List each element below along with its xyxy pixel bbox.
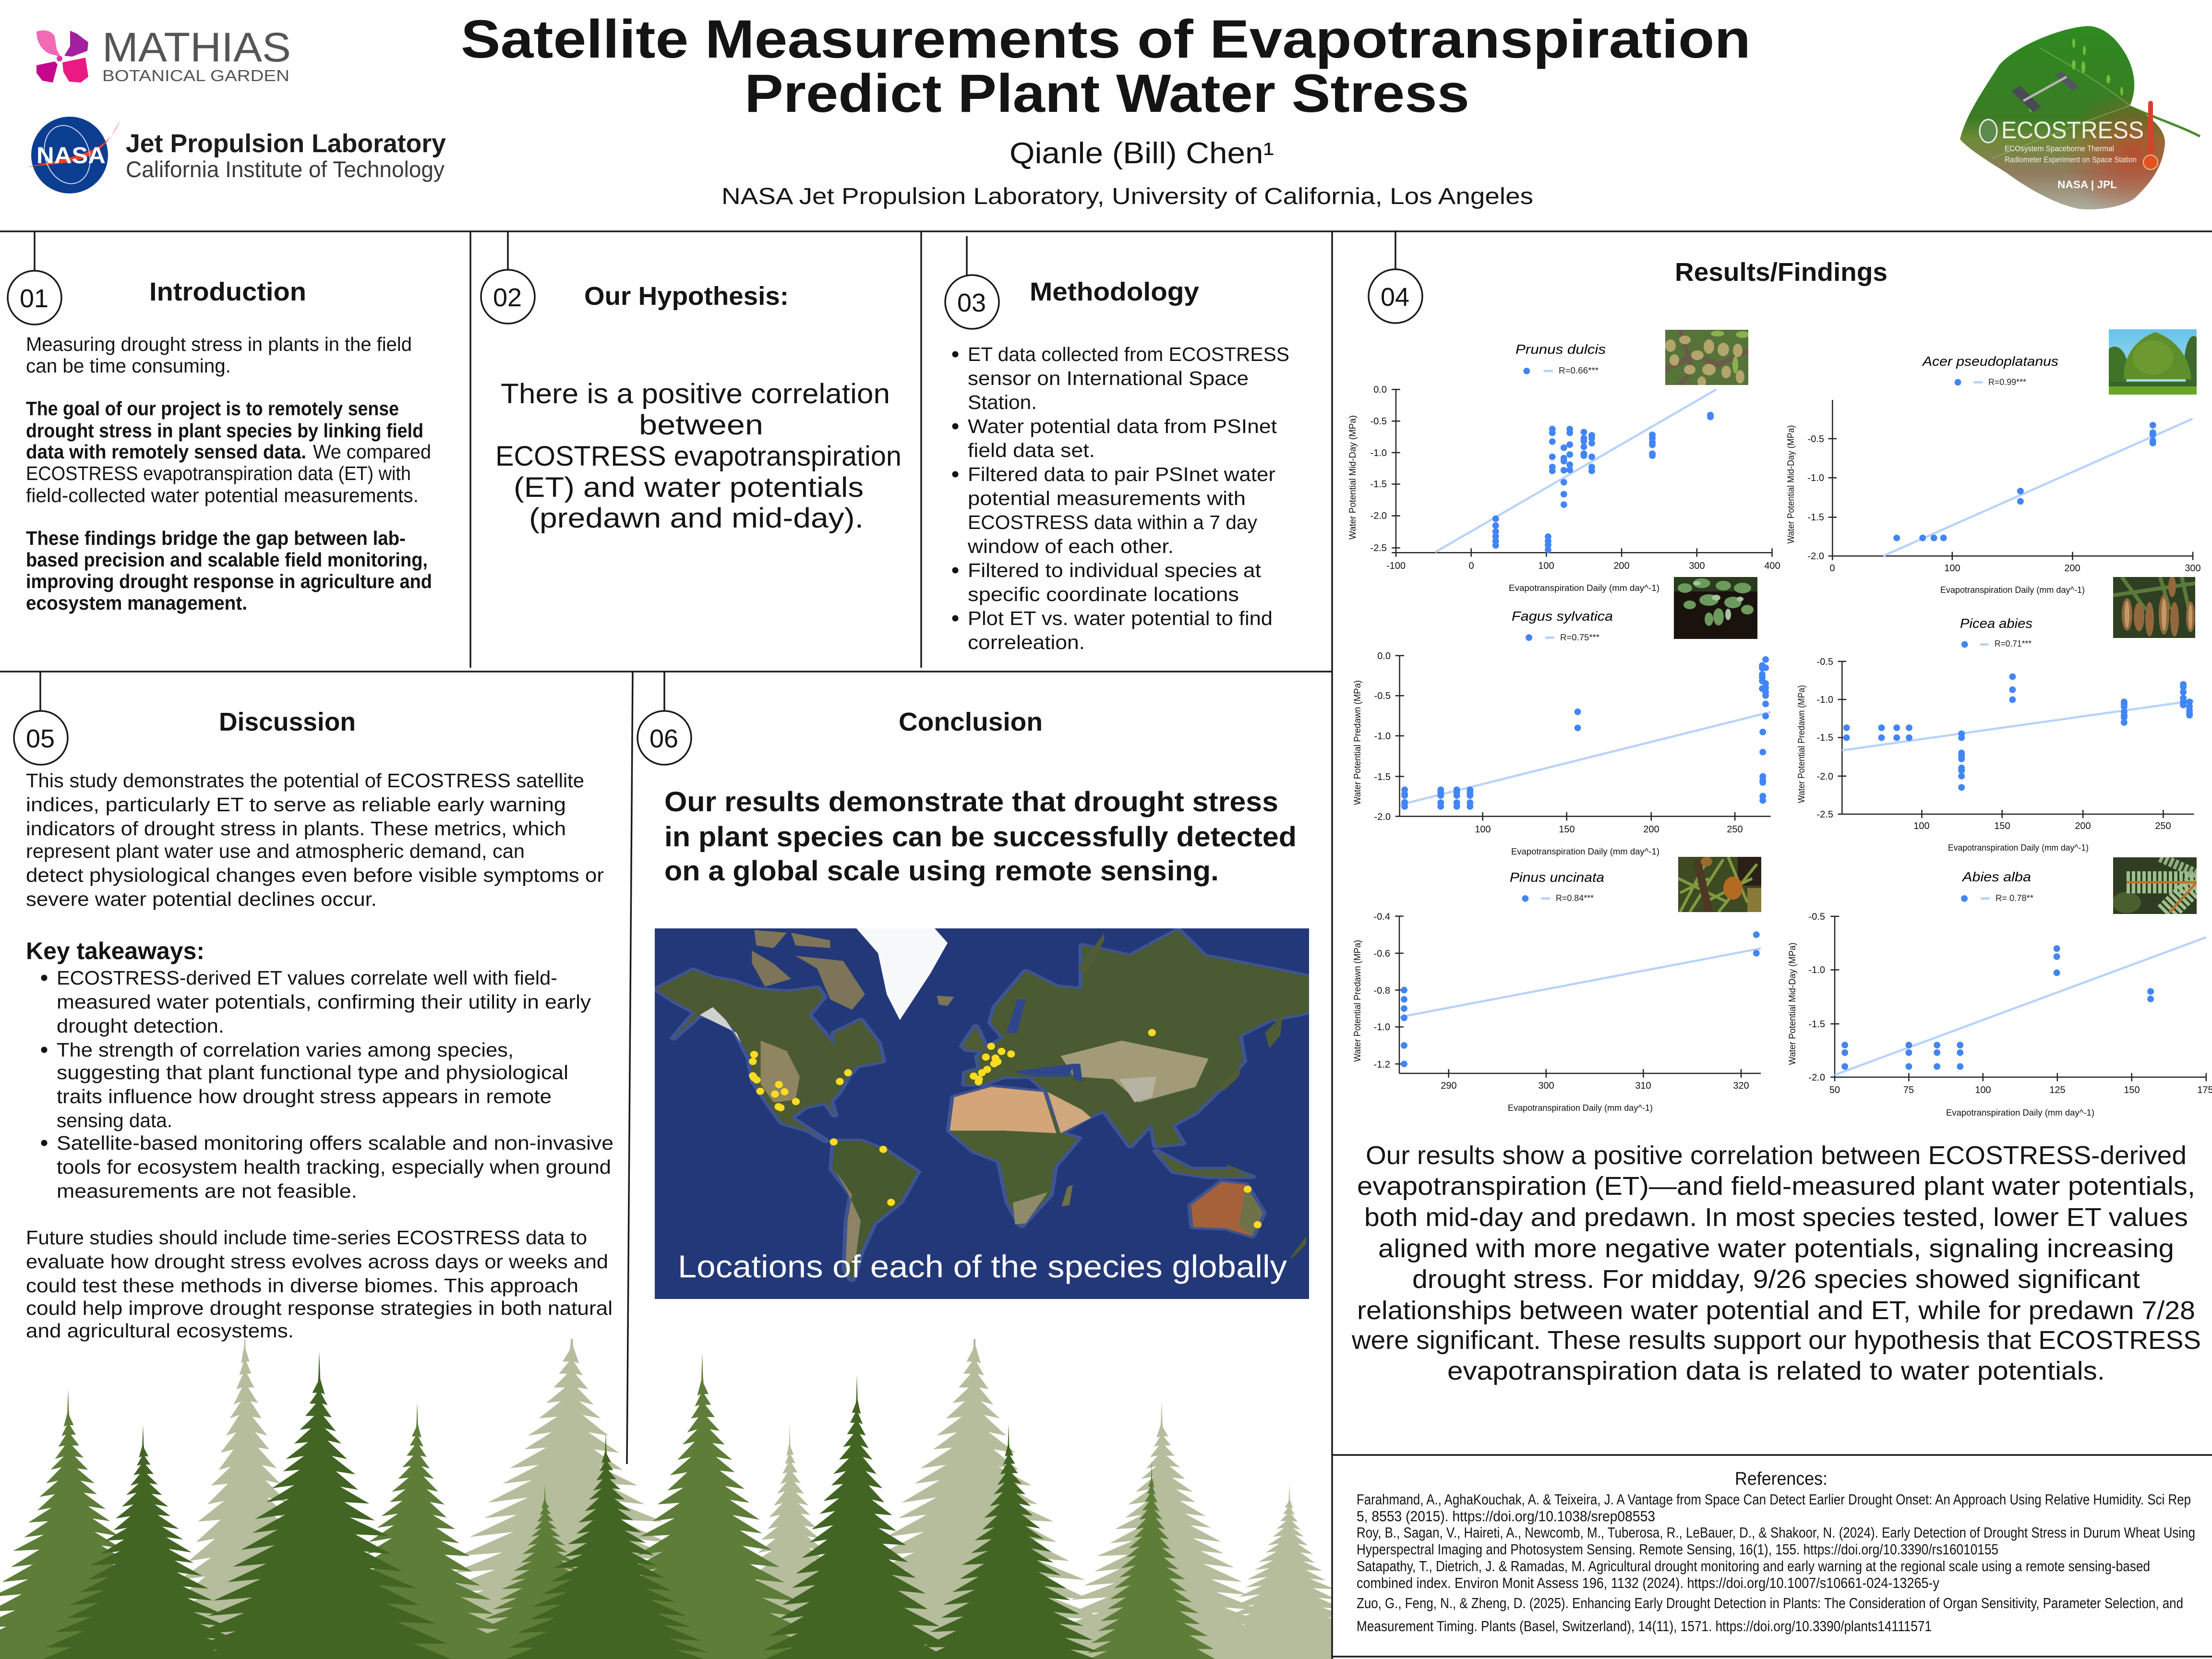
panel: conclusion [637, 672, 1309, 1299]
title: Satellite Measurements of Evapotranspiration [461, 9, 1751, 69]
chart: Abies alba: -2.0 [1809, 1072, 1825, 1083]
list: key takeaways: Satellite-based monitoring offers scalable and non-invasive [57, 1132, 613, 1154]
chart: Fagus sylvatica: -1.0 [1374, 731, 1391, 742]
text: hypothesis statement: ECOSTRESS evapotranspiration [495, 441, 902, 472]
list: key takeaways: sensing data. [57, 1109, 172, 1131]
text: introduction body: ECOSTRESS evapotranspiration data (ET) with [26, 462, 411, 484]
chart: Fagus sylvatica: Water Potential Predawn (MPa) [1353, 680, 1363, 805]
list: methodology steps: potential measurements with [968, 487, 1246, 509]
text: results summary: relationships between water potential and ET, while for predawn 7/28 [1357, 1296, 2195, 1325]
chart: Acer pseudoplatanus: Evapotranspiration Daily (mm day^-1) [1940, 585, 2085, 595]
chart: Pinus uncinata: Evapotranspiration Daily (mm day^-1) [1508, 1103, 1653, 1113]
chart: Prunus dulcis: 400 [1764, 561, 1780, 571]
section marker 01: 01 [20, 284, 48, 313]
chart: Abies alba: 50 [1829, 1085, 1840, 1095]
text: conclusion statement: Our results demonstrate that drought stress [664, 786, 1278, 817]
chart: Pinus uncinata: Pinus uncinata [1510, 870, 1604, 885]
photo: beech leaves [1674, 577, 1757, 639]
text: results summary: Our results show a positive correlation between ECOSTRESS-derived [1366, 1141, 2187, 1170]
lakes and seas [1013, 1064, 1074, 1077]
section marker 02: 02 [493, 283, 522, 312]
chart: Picea abies: 200 [2075, 821, 2091, 831]
chart: Prunus dulcis: Evapotranspiration Daily (mm day^-1) [1509, 583, 1659, 593]
chart: Picea abies: 250 [2155, 821, 2171, 831]
icon: NASA meatball: NASA [36, 143, 106, 168]
chart: Pinus uncinata: -0.8 [1374, 986, 1390, 996]
list: methodology steps: window of each other. [967, 535, 1174, 557]
chart: Picea abies [1797, 576, 2195, 853]
list: methodology steps [952, 343, 1289, 653]
chart: Prunus dulcis: R=0.66*** [1559, 366, 1599, 375]
chart: Picea abies: -0.5 [1817, 657, 1833, 667]
logo: Mathias Botanical Garden: BOTANICAL GARDEN [102, 67, 289, 84]
text: introduction body: drought stress in plant species by linking field [26, 420, 423, 442]
chart: Prunus dulcis: -100 [1386, 561, 1406, 571]
chart: Picea abies: -1.0 [1817, 695, 1833, 705]
chart: Pinus uncinata: -1.2 [1374, 1059, 1390, 1070]
chart: Prunus dulcis [1348, 330, 1780, 593]
text: introduction body: We compared [313, 441, 431, 463]
text: introduction body: can be time consuming. [26, 355, 231, 377]
icon: NASA meatball [27, 117, 120, 193]
text: hypothesis statement [495, 378, 902, 534]
list: key takeaways: measurements are not feasible. [57, 1180, 357, 1202]
text: future studies: Future studies should include time-series ECOSTRESS data to [26, 1226, 587, 1249]
heading: results: Results/Findings [1675, 258, 1887, 287]
land: UK and islands [963, 933, 1306, 1259]
section marker 01 [8, 231, 61, 325]
text: future studies: and agricultural ecosystems. [26, 1320, 294, 1342]
logo: NASA JPL [27, 117, 446, 193]
chart: Acer pseudoplatanus: 300 [2185, 563, 2201, 574]
chart: Fagus sylvatica: 200 [1643, 824, 1659, 835]
chart: Abies alba: -1.5 [1809, 1019, 1825, 1030]
icon: space station [2011, 72, 2079, 112]
chart: Abies alba: Abies alba [1961, 869, 2031, 884]
chart: Acer pseudoplatanus: 200 [2064, 563, 2080, 574]
list: key takeaways: measured water potentials, confirming their utility in early [57, 991, 591, 1013]
section marker 02 [481, 231, 535, 324]
text: results summary: evapotranspiration data is related to water potentials. [1447, 1357, 2105, 1385]
logo: ECOSTRESS leaf: ECOsystem Spaceborne Thermal [2005, 144, 2114, 153]
heading: references: References: [1735, 1469, 1827, 1489]
list: key takeaways: traits influence how drought stress appears in remote [57, 1085, 552, 1107]
chart: Picea abies: 150 [1994, 821, 2010, 831]
chart: Acer pseudoplatanus: -1.0 [1808, 473, 1824, 483]
text: introduction body: improving drought response in agriculture and [26, 570, 432, 592]
affiliation: NASA Jet Propulsion Laboratory, University of California, Los Angeles [721, 184, 1533, 209]
chart: Fagus sylvatica: 250 [1727, 824, 1743, 835]
logo: NASA JPL: Jet Propulsion Laboratory [126, 129, 446, 158]
chart: Abies alba: Water Potential Mid-Day (MPa) [1788, 943, 1798, 1065]
chart: Acer pseudoplatanus: -0.5 [1808, 434, 1824, 445]
text: reference list: combined index. Environ Monit Assess 196, 1132 (2024). https://doi.org/10.1007/s10661-024-13265-y [1357, 1575, 1939, 1591]
photo: sycamore maple tree [2109, 329, 2197, 395]
text: reference list: 5, 8553 (2015). https://doi.org/10.1038/srep08553 [1357, 1508, 1655, 1525]
text: introduction body: ecosystem management. [26, 592, 247, 614]
forest silhouette [0, 1315, 1381, 1659]
section marker 06: 06 [649, 724, 678, 753]
chart: Picea abies: R=0.71*** [1995, 639, 2032, 649]
text: discussion intro: detect physiological changes even before visible symptoms or [26, 864, 604, 886]
chart: Acer pseudoplatanus: -1.5 [1808, 512, 1824, 523]
chart: Acer pseudoplatanus: 100 [1944, 563, 1960, 574]
chart: Abies alba: -1.0 [1809, 965, 1825, 975]
chart: Abies alba: -0.5 [1809, 912, 1825, 922]
continental shelves [656, 930, 1309, 1280]
location markers [749, 1029, 1262, 1228]
chart: Fagus sylvatica [1353, 577, 1771, 856]
panel: discussion [14, 672, 613, 1342]
list: methodology steps: Filtered to individual species at [968, 559, 1262, 581]
text: discussion intro: represent plant water use and atmospheric demand, can [26, 840, 525, 862]
list: key takeaways [41, 967, 613, 1202]
chart: Prunus dulcis: Prunus dulcis [1515, 342, 1606, 357]
section marker 03: 03 [957, 289, 986, 317]
section marker 06 [637, 672, 691, 765]
logo: ECOSTRESS leaf: NASA | JPL [2057, 179, 2117, 191]
chart: Picea abies: -2.0 [1817, 771, 1833, 782]
text: results summary: were significant. These results support our hypothesis that ECOSTRESS [1351, 1326, 2201, 1355]
chart: Picea abies: Picea abies [1960, 616, 2032, 631]
land: Greenland [856, 928, 948, 1020]
text: reference list [1357, 1491, 2195, 1635]
panel: hypothesis [481, 231, 902, 534]
list: methodology steps: Plot ET vs. water potential to find [968, 607, 1273, 629]
land: Eurasia [965, 930, 1309, 1146]
text: hypothesis statement: (ET) and water potentials [514, 472, 864, 503]
chart: Fagus sylvatica: 150 [1559, 824, 1575, 835]
chart: Pinus uncinata: 290 [1441, 1081, 1457, 1091]
heading: methodology: Methodology [1030, 277, 1199, 306]
chart: Picea abies: Water Potential Predawn (MPa) [1797, 685, 1807, 803]
list: methodology steps: Water potential data from PSInet [968, 415, 1277, 437]
chart: Acer pseudoplatanus: R=0.99*** [1988, 377, 2026, 387]
list: key takeaways: tools for ecosystem health tracking, especially when ground [57, 1156, 611, 1178]
text: results summary: aligned with more negative water potentials, signaling increasing [1378, 1234, 2174, 1263]
text: results summary: drought stress. For midday, 9/26 species showed significant [1412, 1265, 2140, 1294]
chart: Picea abies: -2.5 [1817, 809, 1833, 820]
text: future studies: evaluate how drought stress evolves across days or weeks and [26, 1250, 608, 1273]
chart: Prunus dulcis: -0.5 [1370, 416, 1387, 427]
text: introduction body [26, 333, 432, 614]
chart: Prunus dulcis: Water Potential Mid-Day (MPa) [1348, 415, 1358, 540]
chart: Prunus dulcis: 200 [1613, 561, 1630, 571]
list: key takeaways: The strength of correlation varies among species, [57, 1039, 514, 1061]
chart: Pinus uncinata: 320 [1733, 1081, 1749, 1091]
chart: Fagus sylvatica: -0.5 [1374, 691, 1391, 701]
panel: results [1348, 230, 2212, 1385]
text: results summary [1351, 1141, 2201, 1385]
list: methodology steps: correleation. [968, 631, 1085, 653]
list: key takeaways: ECOSTRESS-derived ET values correlate well with field- [57, 967, 557, 989]
text: reference list: Measurement Timing. Plants (Basel, Switzerland), 14(11), 1571. https://doi.org/10.3390/plants14111571 [1357, 1618, 1932, 1635]
list: key takeaways: drought detection. [57, 1015, 224, 1037]
map caption: Locations of each of the species globally [678, 1249, 1287, 1284]
chart: Pinus uncinata: Water Potential Predawn (MPa) [1353, 940, 1363, 1062]
text: conclusion statement: in plant species can be successfully detected [664, 821, 1297, 853]
photo: fir branch [2112, 857, 2197, 914]
land: Australia [1191, 1182, 1263, 1236]
chart: Acer pseudoplatanus: 0 [1829, 563, 1835, 574]
chart: Pinus uncinata: R=0.84*** [1556, 893, 1594, 903]
list: methodology steps: ET data collected from ECOSTRESS [968, 343, 1289, 365]
text: conclusion statement [664, 786, 1297, 887]
text: discussion intro: indices, particularly ET to serve as reliable early warning [26, 793, 566, 816]
chart: Fagus sylvatica: Fagus sylvatica [1512, 609, 1613, 624]
list: methodology steps: Station. [968, 391, 1037, 413]
chart: Prunus dulcis: 0.0 [1373, 385, 1387, 395]
text: future studies: could help improve drought response strategies in both natural [26, 1297, 613, 1319]
heading: conclusion: Conclusion [899, 708, 1043, 736]
text: future studies: could test these methods in diverse biomes. This approach [26, 1274, 578, 1297]
text: hypothesis statement: between [639, 409, 763, 441]
chart: Prunus dulcis: 0 [1468, 561, 1474, 571]
heading: hypothesis: Our Hypothesis: [584, 282, 789, 311]
logo: Mathias Botanical Garden: MATHIAS [102, 24, 291, 71]
land: Arctic islands [752, 930, 954, 1010]
list: key takeaways: suggesting that plant functional type and physiological [57, 1061, 568, 1083]
text: introduction body: field-collected water potential measurements. [26, 484, 419, 506]
chart: Abies alba: 100 [1975, 1085, 1991, 1095]
text: introduction body: Measuring drought stress in plants in the field [26, 333, 412, 355]
text: discussion intro: severe water potential declines occur. [26, 888, 377, 910]
chart: Pinus uncinata: 300 [1538, 1081, 1554, 1091]
chart: Acer pseudoplatanus: -2.0 [1808, 551, 1824, 562]
text: hypothesis statement: (predawn and mid-day). [529, 503, 864, 534]
chart: Acer pseudoplatanus: Acer pseudoplatanus [1922, 354, 2058, 369]
logo: ECOSTRESS leaf: ECOSTRESS [2001, 117, 2144, 144]
chart: Picea abies: -1.5 [1817, 733, 1833, 743]
text: conclusion statement: on a global scale using remote sensing. [664, 855, 1219, 887]
text: introduction body: These findings bridge the gap between lab- [26, 527, 406, 549]
logo: NASA JPL: California Institute of Technology [126, 156, 445, 182]
photo: spruce cones [2113, 576, 2195, 638]
text: hypothesis statement: There is a positive correlation [501, 378, 890, 409]
section marker 05 [14, 672, 68, 765]
chart: Fagus sylvatica: 0.0 [1377, 651, 1391, 661]
list: methodology steps: sensor on International Space [968, 367, 1249, 389]
text: discussion intro [26, 769, 604, 910]
chart: Abies alba: Evapotranspiration Daily (mm day^-1) [1946, 1108, 2094, 1118]
chart: Acer pseudoplatanus: Water Potential Mid-Day (MPa) [1786, 425, 1796, 543]
list: methodology steps: Filtered data to pair PSInet water [968, 463, 1275, 485]
chart: Fagus sylvatica: -1.5 [1374, 772, 1391, 782]
heading: discussion: Discussion [219, 708, 356, 736]
chart: Prunus dulcis: -2.0 [1370, 511, 1387, 521]
land: North America [656, 970, 882, 1141]
text: future studies [26, 1226, 613, 1342]
icon: Mathias flower [36, 30, 88, 83]
text: discussion intro: This study demonstrates the potential of ECOSTRESS satellite [26, 769, 584, 792]
photo: pine cone [1678, 857, 1761, 912]
text: results summary: evapotranspiration (ET)—and field-measured plant water potentials, [1357, 1172, 2195, 1201]
chart: Abies alba: 75 [1903, 1085, 1914, 1095]
author: Qianle (Bill) Chen¹ [1010, 137, 1274, 170]
chart: Fagus sylvatica: -2.0 [1374, 812, 1391, 822]
logo: ECOSTRESS leaf [1960, 26, 2200, 209]
panel: references [1357, 1469, 2195, 1635]
chart: Prunus dulcis: -1.0 [1370, 448, 1387, 458]
section marker 04: 04 [1381, 283, 1409, 312]
section marker 05: 05 [26, 724, 55, 753]
list: methodology steps: ECOSTRESS data within a 7 day [968, 511, 1257, 533]
title: Predict Plant Water Stress [745, 63, 1469, 123]
section marker 04 [1369, 230, 1422, 323]
chart: Pinus uncinata: -1.0 [1374, 1022, 1390, 1033]
chart: Picea abies: 100 [1913, 821, 1930, 831]
chart: Abies alba: 125 [2049, 1085, 2066, 1095]
heading: introduction: Introduction [149, 277, 306, 306]
chart: Acer pseudoplatanus [1786, 329, 2203, 595]
land: South America [832, 1141, 917, 1280]
panel: introduction [8, 231, 432, 614]
text: discussion intro: indicators of drought stress in plants. These metrics, which [26, 817, 566, 840]
section marker 03 [945, 236, 999, 329]
logo: Mathias Botanical Garden [36, 24, 291, 84]
chart: Fagus sylvatica: Evapotranspiration Daily (mm day^-1) [1511, 847, 1659, 856]
logo: ECOSTRESS leaf: Radiometer Experiment on Space Station [2005, 155, 2137, 164]
heading: key takeaways: Key takeaways: [26, 938, 204, 964]
text: introduction body: data with remotely sensed data. [26, 441, 306, 463]
chart: Pinus uncinata [1353, 857, 1761, 1113]
chart: Prunus dulcis: 300 [1689, 561, 1705, 571]
map: species locations [655, 928, 1309, 1299]
land: Africa [950, 1087, 1078, 1226]
chart: Prunus dulcis: -2.5 [1370, 543, 1387, 553]
list: methodology steps: specific coordinate locations [968, 583, 1239, 605]
text: results summary: both mid-day and predawn. In most species tested, lower ET values [1364, 1203, 2188, 1232]
text: introduction body: based precision and scalable field monitoring, [26, 549, 428, 571]
text: reference list: Hyperspectral Imaging and Photosystem Sensing. Remote Sensing, 16(1), 155. https://doi.org/10.3390/rs16010155 [1357, 1541, 1998, 1558]
chart: Pinus uncinata: -0.4 [1374, 912, 1390, 922]
title [461, 9, 1751, 123]
chart: Picea abies: Evapotranspiration Daily (mm day^-1) [1948, 843, 2089, 853]
photo: almonds [1665, 330, 1749, 387]
chart: Pinus uncinata: -0.6 [1374, 949, 1390, 959]
chart: Prunus dulcis: 100 [1538, 561, 1554, 571]
chart: Pinus uncinata: 310 [1635, 1081, 1651, 1091]
icon: thermometer [2143, 101, 2158, 169]
panel: methodology [945, 236, 1289, 653]
chart: Abies alba [1788, 857, 2212, 1118]
chart: Abies alba: 150 [2124, 1085, 2140, 1095]
chart: Abies alba: R= 0.78** [1996, 893, 2033, 903]
list: methodology steps: field data set. [968, 439, 1095, 461]
chart: Fagus sylvatica: R=0.75*** [1560, 633, 1599, 642]
text: introduction body: The goal of our project is to remotely sense [26, 397, 399, 420]
chart: Prunus dulcis: -1.5 [1370, 479, 1387, 490]
chart: Fagus sylvatica: 100 [1475, 824, 1491, 835]
